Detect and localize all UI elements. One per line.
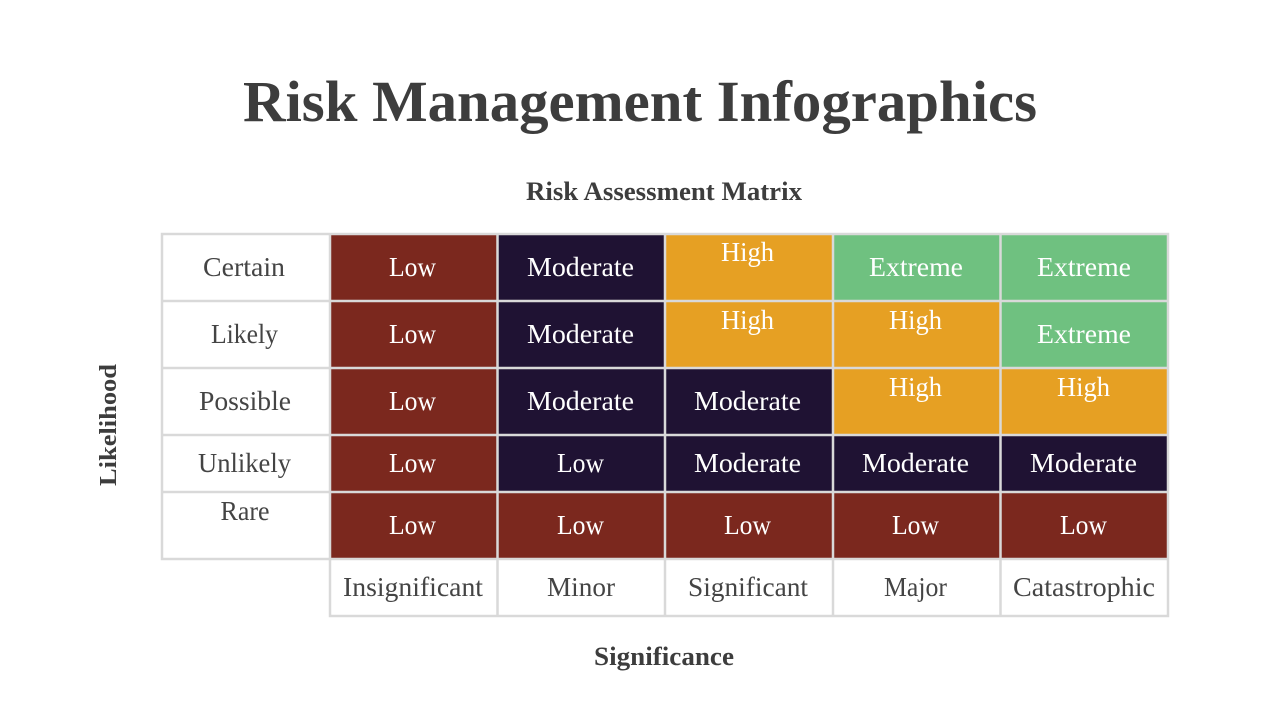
row labels: Certain [203, 252, 286, 282]
cell labels: Extreme [1037, 252, 1131, 282]
x axis title: significance: Significance [594, 642, 734, 671]
cell labels: Low [389, 448, 436, 478]
y axis title: likelihood: Likelihood [96, 363, 122, 486]
cell labels: Low [1060, 510, 1107, 540]
row labels: Possible [199, 386, 291, 416]
title: Risk Management Infographics [243, 69, 1037, 134]
colored cells [330, 234, 1168, 559]
cell labels: Low [389, 252, 436, 282]
cell labels: Moderate [694, 386, 801, 416]
cell labels: High [1057, 372, 1110, 402]
cell labels: Moderate [527, 386, 634, 416]
column labels: Insignificant [343, 572, 484, 602]
cell labels: Moderate [527, 319, 634, 349]
cell labels: Low [557, 448, 604, 478]
cell labels: High [889, 372, 942, 402]
grid lines [161, 233, 1169, 617]
cell labels: High [721, 237, 774, 267]
cell labels: Low [389, 510, 436, 540]
cell labels: Extreme [1037, 319, 1131, 349]
cell labels: Low [389, 386, 436, 416]
cell labels: Extreme [869, 252, 963, 282]
row labels: Unlikely [198, 448, 291, 478]
column labels: Significant [688, 572, 809, 602]
row labels: Likely [211, 319, 278, 349]
row labels [198, 252, 291, 526]
cell labels: Moderate [862, 448, 969, 478]
cell labels: Low [389, 319, 436, 349]
column labels: Catastrophic [1013, 572, 1155, 602]
cell labels: Low [557, 510, 604, 540]
column labels: Major [884, 572, 947, 602]
cell labels: High [721, 305, 774, 335]
cell labels [389, 237, 1137, 540]
column labels [343, 572, 1155, 602]
column labels: Minor [547, 572, 615, 602]
cell labels: Moderate [527, 252, 634, 282]
matrix subtitle: Risk Assessment Matrix [526, 177, 802, 206]
cell labels: High [889, 305, 942, 335]
risk matrix table [161, 233, 1169, 617]
cell labels: Low [892, 510, 939, 540]
cell labels: Moderate [1030, 448, 1137, 478]
row labels: Rare [220, 496, 270, 526]
cell labels: Low [724, 510, 771, 540]
cell labels: Moderate [694, 448, 801, 478]
